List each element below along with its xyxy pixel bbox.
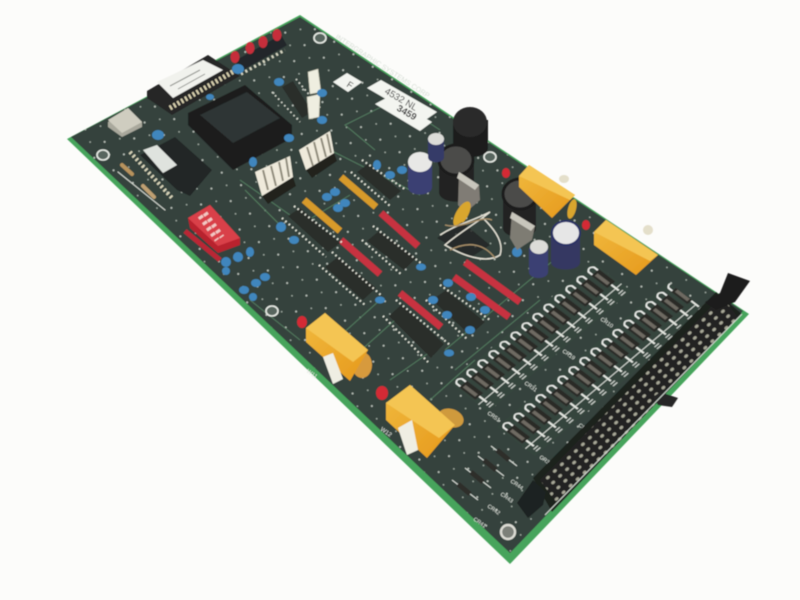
- IC pin rows: [282, 160, 490, 362]
- relay lower left: [306, 313, 368, 384]
- silkscreen connector labels: W11: [305, 369, 319, 381]
- inductor top: [453, 107, 488, 157]
- yellow disc capacitors: [352, 198, 578, 431]
- diode labels: CR19: [561, 349, 576, 362]
- chip label: [157, 60, 223, 98]
- capacitor large left: [408, 152, 432, 194]
- pin row: [170, 70, 236, 108]
- diode labels: CR51: [486, 411, 501, 424]
- diode labels: CR7: [654, 359, 666, 370]
- diode labels: CR42: [486, 504, 501, 517]
- diode labels: CR6: [616, 391, 628, 402]
- relay top: [519, 165, 575, 218]
- diode row one: [450, 262, 631, 412]
- inductor right: [503, 179, 537, 237]
- label: part number: 4532 NL: [382, 86, 419, 114]
- axial resistors left: [118, 165, 165, 210]
- edge connector: [517, 273, 750, 518]
- diode labels: CR41: [472, 517, 487, 530]
- capacitor small top: [428, 133, 444, 162]
- LED row: [230, 29, 285, 74]
- lower small diodes: [452, 446, 524, 530]
- orange resistor packs: [304, 177, 376, 231]
- red resistor pack left: [185, 231, 220, 260]
- capacitor small lower: [529, 240, 548, 278]
- connector: [323, 353, 343, 384]
- red DIP switch: [188, 205, 240, 253]
- serial labels: [333, 34, 437, 131]
- label: serial number: 3459: [394, 103, 418, 123]
- relay lower right: [386, 385, 455, 458]
- silkscreen connector labels: [305, 369, 393, 439]
- silkscreen company name: INTERGRAPHIC SYSTEMS CORP: [334, 34, 431, 100]
- silkscreen connector labels: W12: [379, 427, 393, 439]
- diode labels: CR5: [577, 423, 589, 434]
- DIP chip left with label: [130, 137, 212, 198]
- small white jumpers: [307, 69, 321, 119]
- inductor middle: [439, 145, 474, 202]
- end block: [517, 480, 546, 518]
- dark IC chips: [288, 164, 485, 358]
- small logic chip top: [272, 79, 322, 122]
- white multi-pin connector right: [299, 131, 337, 178]
- red resistor packs: [341, 213, 520, 327]
- solder points: [71, 17, 743, 553]
- capacitor large right: [551, 221, 580, 270]
- diode arrays: [450, 262, 706, 466]
- electrolytic capacitors: [408, 133, 580, 278]
- crystal oscillator: [108, 108, 142, 137]
- chip label: [143, 145, 177, 173]
- memory chip with label: [147, 55, 240, 115]
- board: [67, 15, 749, 564]
- diode labels: CR43: [499, 492, 514, 505]
- relay right: [594, 220, 658, 275]
- side tab: [653, 392, 678, 407]
- copper traces: [240, 100, 560, 400]
- diode labels: [472, 479, 524, 530]
- twisted wires: [437, 212, 501, 259]
- black inductors: [439, 107, 537, 237]
- blue capacitors: [152, 64, 522, 356]
- connector: [398, 420, 418, 455]
- pin header: [540, 296, 738, 505]
- red status LEDs: [297, 168, 590, 400]
- top ear: [705, 273, 750, 310]
- diode labels: CR10: [599, 317, 614, 330]
- diode labels: CR3: [538, 455, 550, 466]
- diode labels: CR31: [523, 381, 538, 394]
- regulator one: [457, 172, 480, 213]
- voltage regulators: [457, 172, 535, 250]
- board surface: [71, 17, 743, 553]
- diode row two: [497, 282, 706, 456]
- board edge: [67, 15, 749, 564]
- connector housing: [533, 292, 742, 512]
- all board parts with photo softness: [67, 15, 750, 564]
- diode labels: [486, 317, 666, 466]
- mounting holes: [97, 33, 515, 539]
- white multi-pin connector left: [255, 156, 296, 204]
- edge strip: [545, 314, 742, 515]
- regulator two: [510, 212, 535, 250]
- label: revision: F: [345, 79, 355, 91]
- large square processor chip: [188, 85, 292, 170]
- diode labels: CR44: [509, 479, 524, 492]
